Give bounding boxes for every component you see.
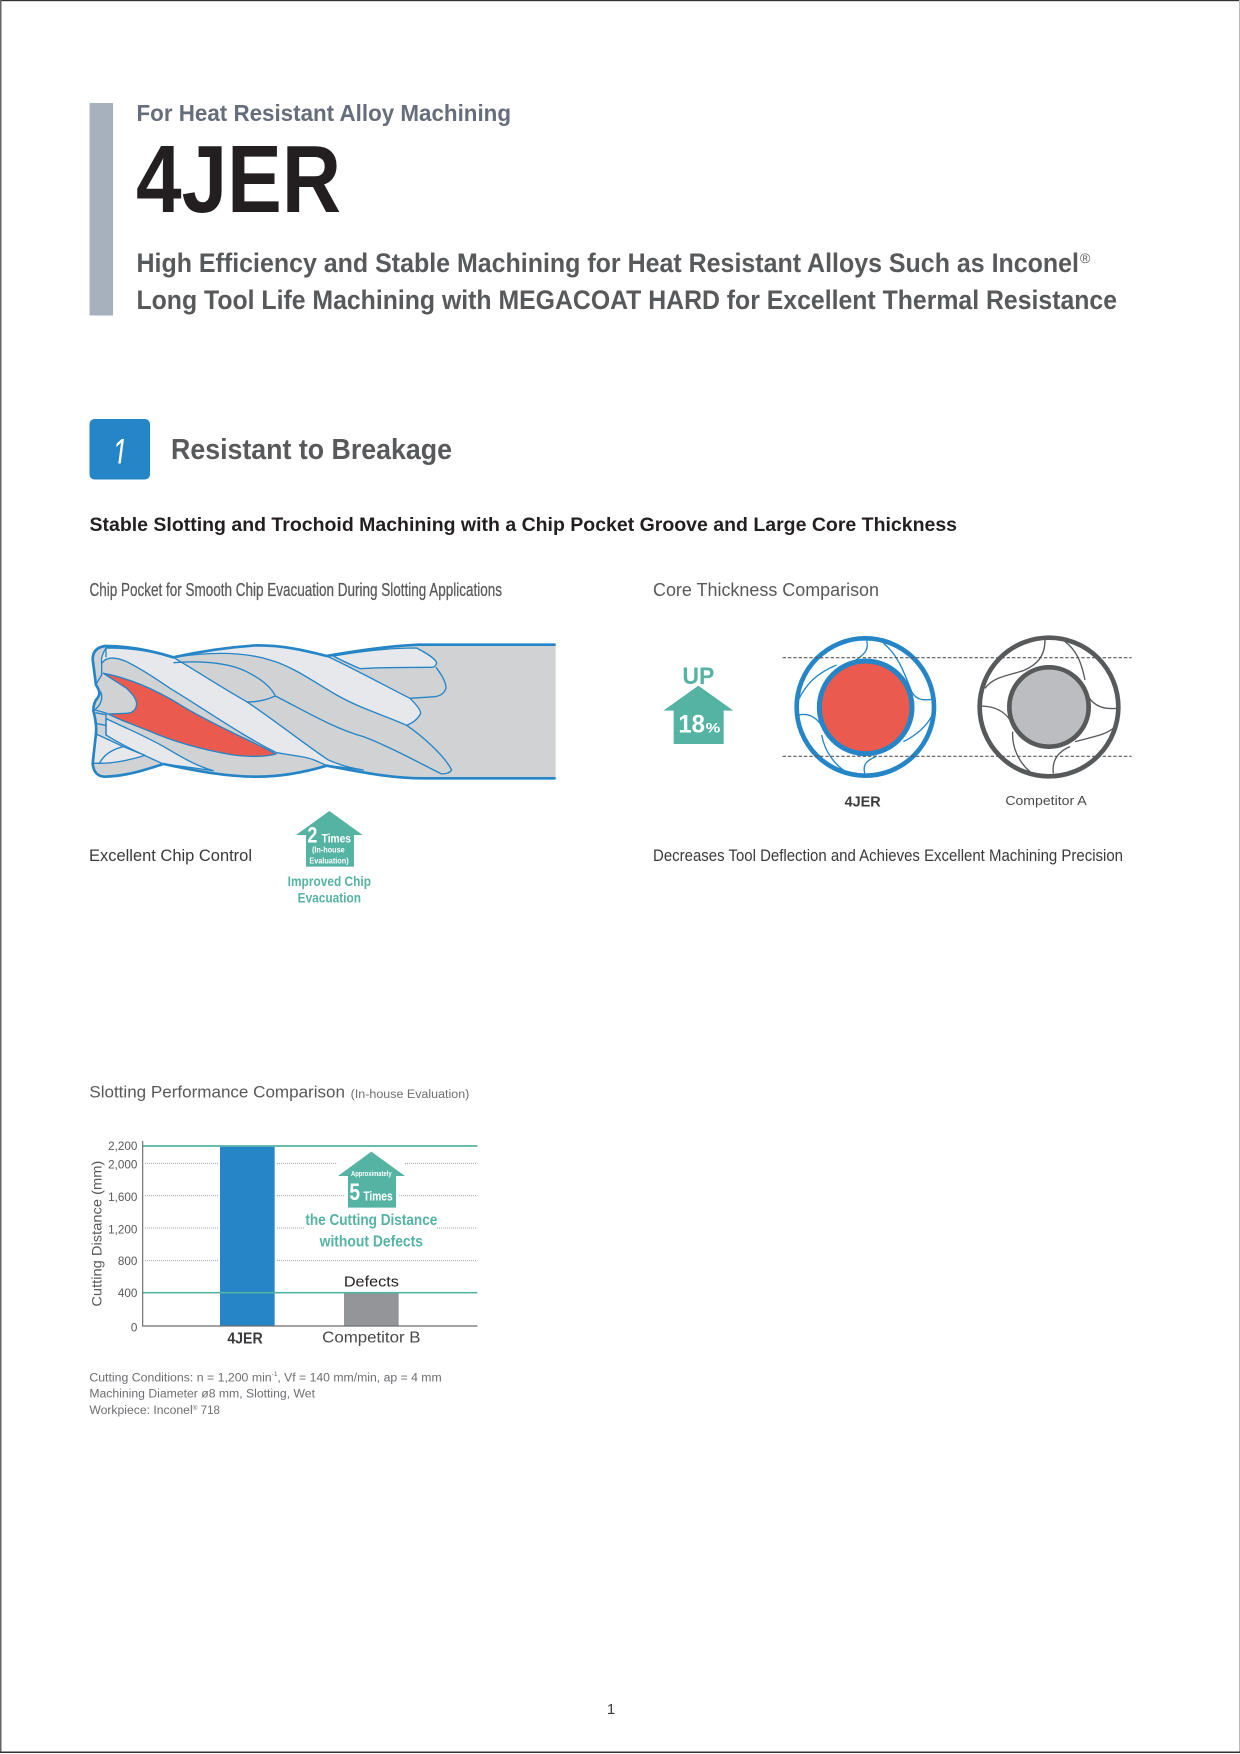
approximately label: Approximately (351, 1169, 392, 1178)
y axis labels (108, 1140, 138, 1335)
chip control caption: Excellent Chip Control (89, 846, 252, 865)
panel: slotting performance chart (89, 1082, 477, 1347)
header accent bar (90, 103, 113, 316)
y axis labels: 2,200 (108, 1140, 138, 1153)
chart title note: (In-house Evaluation) (351, 1087, 469, 1101)
callout word UP: UP (682, 663, 714, 690)
callout: up 18 percent (663, 663, 733, 744)
cutting conditions note: Workpiece: Inconel (89, 1403, 193, 1417)
4JER cross-section (797, 638, 934, 776)
category label 4JER: 4JER (227, 1330, 263, 1347)
bar: Competitor B 400 (344, 1293, 399, 1326)
percent sign: % (706, 720, 721, 736)
cutting conditions note: 718 (201, 1403, 220, 1417)
bar: 4JER 2,200 (218, 1147, 276, 1326)
y axis labels: 800 (118, 1255, 138, 1268)
cutting conditions note: Machining Diameter ø8 mm, Slotting, Wet (89, 1387, 316, 1401)
tool outline (93, 645, 556, 778)
value 18: 18 (678, 712, 705, 739)
y axis labels: 0 (131, 1322, 138, 1335)
multiplier number: 5 (349, 1179, 360, 1206)
callout: 2 times improved chip evacuation (288, 811, 371, 906)
section title: Resistant to Breakage (171, 434, 452, 466)
core thickness heading: Core Thickness Comparison (653, 579, 879, 600)
multiplier unit: Times (322, 832, 351, 846)
y axis labels: 1,200 (108, 1223, 138, 1236)
competitor A cross-section (980, 638, 1118, 776)
callout: approximately 5 times (305, 1148, 437, 1251)
section number badge (90, 419, 150, 480)
chart title: Slotting Performance Comparison (89, 1082, 345, 1101)
cutting conditions note: Cutting Conditions: n = 1,200 min (89, 1371, 272, 1385)
axes (143, 1141, 477, 1326)
section lead sentence: Stable Slotting and Trochoid Machining with a Chip Pocket Groove and Large Core Thickness (90, 514, 957, 536)
panel: end mill tool illustration (93, 645, 556, 778)
lands (93, 645, 437, 771)
page number: 1 (607, 1701, 615, 1718)
icon: up arrow (663, 686, 733, 744)
title: 4JER (136, 126, 341, 233)
tool body (93, 645, 556, 778)
evaluation note line 1: (In-house (312, 846, 345, 855)
reference lines (143, 1146, 477, 1293)
registered mark: ® (1080, 250, 1091, 266)
callout text line 1: the Cutting Distance (305, 1212, 437, 1229)
callout text line 1: Improved Chip (288, 873, 371, 889)
y axis title: Cutting Distance (mm) (89, 1161, 105, 1307)
cutting conditions note: , Vf = 140 mm/min, ap = 4 mm (277, 1371, 442, 1385)
subtitle line 2: Long Tool Life Machining with MEGACOAT HARD for Excellent Thermal Resistance (136, 285, 1117, 315)
subtitle line 1: High Efficiency and Stable Machining for Heat Resistant Alloys Such as Inconel (136, 248, 1079, 278)
core thickness caption: Decreases Tool Deflection and Achieves Excellent Machining Precision (653, 846, 1123, 865)
section heading: Resistant to Breakage (90, 419, 452, 480)
label 4JER: 4JER (845, 794, 881, 811)
icon: up arrow (338, 1152, 405, 1208)
multiplier unit: Times (363, 1190, 393, 1204)
flute contour lines (93, 648, 452, 774)
red chip pocket (103, 673, 276, 756)
cutting conditions note: ® (193, 1404, 198, 1412)
panel: core thickness comparison (663, 638, 1132, 811)
chip pocket heading: Chip Pocket for Smooth Chip Evacuation During Slotting Applications (90, 580, 502, 600)
label Competitor A: Competitor A (1005, 794, 1087, 808)
y axis labels: 1,600 (108, 1191, 138, 1204)
eyebrow: application: For Heat Resistant Alloy Machining (136, 100, 511, 126)
callout text line 2: without Defects (319, 1234, 423, 1251)
cutting conditions note (89, 1371, 442, 1417)
y axis labels: 2,000 (108, 1159, 138, 1172)
y axis labels: 400 (118, 1287, 138, 1300)
defects label: Defects (344, 1275, 399, 1291)
section number: 1 (112, 432, 128, 476)
header block (90, 100, 1117, 316)
multiplier number: 2 (307, 823, 317, 848)
icon: up arrow (296, 811, 363, 867)
category label Competitor B: Competitor B (322, 1330, 420, 1347)
cutting conditions note: -1 (272, 1371, 278, 1378)
evaluation note line 2: Evaluation) (309, 856, 349, 865)
callout text line 2: Evacuation (298, 890, 361, 906)
